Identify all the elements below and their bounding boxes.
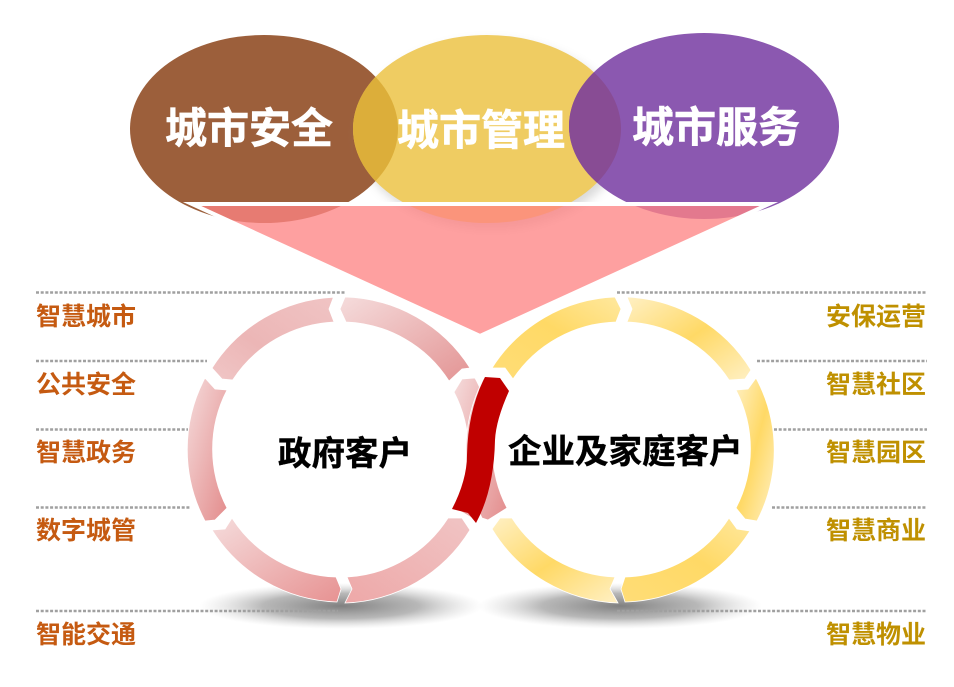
item: 数字城管: 数字城管 [36,516,136,545]
item: 智慧商业: 智慧商业 [826,517,926,545]
ellipse: brown redraw under gold [353,60,398,199]
segment: right [736,378,774,521]
item: 智慧社区: 智慧社区 [826,371,926,399]
right ring: enterprise and family customers [466,297,774,603]
left list: government scenarios [36,302,136,649]
heading: 城市服务: 城市服务 [632,104,800,151]
right list: enterprise scenarios [826,303,926,649]
item: 智慧物业: 智慧物业 [826,621,926,649]
ellipse: purple [569,33,839,219]
segment: left [187,378,227,521]
item: 智慧政务: 智慧政务 [36,439,136,467]
segment: lower right [621,518,750,602]
item: 智能交通: 智能交通 [36,621,136,649]
three overlapping ellipses [130,33,839,229]
segment: right [454,378,494,521]
dotted guide lines: right column [617,292,927,611]
ellipse: gold [353,35,621,223]
shadow under left ring [199,583,483,629]
segment: left pink [466,378,507,520]
item: 安保运营: 安保运营 [826,303,926,331]
label: 政府客户: 政府客户 [278,436,412,473]
segment: lower left [492,518,618,603]
overlap: gold and purple [569,72,621,182]
segment: upper right [627,297,751,380]
item: 公共安全: 公共安全 [36,371,136,399]
item: 智慧园区: 智慧园区 [826,439,926,467]
segment: lower right [345,518,470,603]
interlocking red band [452,377,509,523]
heading: 城市管理: 城市管理 [397,107,565,154]
ellipse shadow: gold [357,41,625,229]
item: 智慧城市: 智慧城市 [36,302,136,331]
segment: upper left [492,297,621,379]
shadow under right ring [478,583,762,629]
left ring: government customers [187,297,494,603]
funnel triangle [192,204,769,336]
segment: lower left [212,518,341,602]
segment: upper right [340,297,470,381]
heading: 城市安全: 城市安全 [165,105,333,152]
overlap: brown and gold [353,77,398,181]
dotted guide lines: left column [36,292,345,611]
label: 企业及家庭客户: 企业及家庭客户 [508,434,742,471]
ellipse: brown [130,35,398,223]
segment: upper left [212,297,334,380]
